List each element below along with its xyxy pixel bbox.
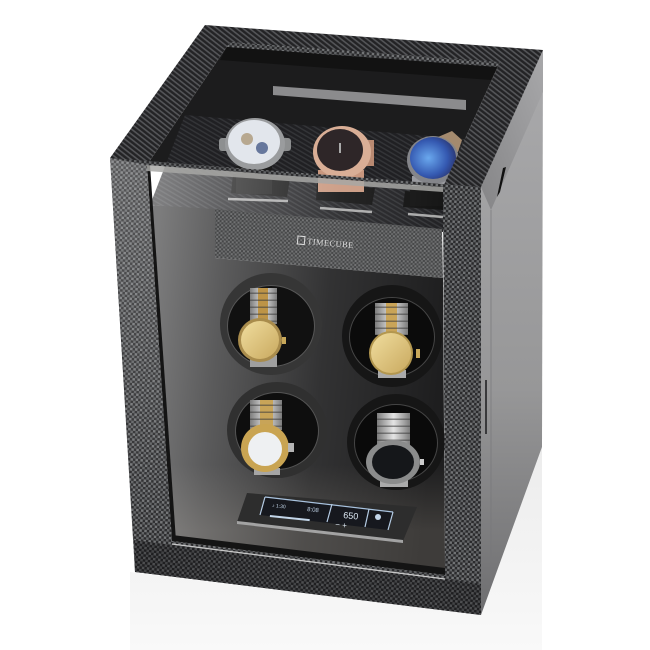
lid side panel: [481, 50, 543, 210]
front carbon frame: [110, 158, 481, 615]
lid window interior: [147, 41, 500, 187]
inner black gasket bottom: [172, 535, 445, 575]
top watches: [219, 118, 462, 206]
rotors: [220, 273, 445, 490]
display time text: 8:08: [307, 507, 320, 514]
display screen: [260, 497, 393, 530]
brand name: TIMECUBE: [307, 236, 354, 250]
rotor 4 with black dial watch: [347, 394, 445, 490]
display modes: [270, 515, 310, 521]
display dividers: [260, 497, 393, 530]
top carbon lid frame: [110, 25, 543, 187]
side seam: [490, 210, 492, 585]
watch tray: [150, 115, 475, 232]
touch control panel: [237, 493, 417, 543]
display icon: [375, 514, 381, 520]
left strip sheen: [110, 158, 172, 541]
display controls: − +: [335, 520, 348, 530]
side button: [485, 380, 487, 434]
top watch right: [407, 131, 462, 206]
top watch centre: [313, 126, 374, 192]
display outline: [265, 497, 393, 512]
cup highlights: [228, 199, 443, 217]
rotor 2 with gold date watch: [342, 285, 442, 387]
display date text: ♪ 1:30: [272, 503, 286, 510]
glass front top edge: [147, 165, 443, 192]
floor reflection: [130, 447, 542, 650]
rotor 1 with gold jubilee watch: [220, 273, 322, 375]
cabinet floor band: [170, 474, 445, 575]
bottom rim highlight: [172, 544, 445, 579]
inner black gasket left: [147, 165, 176, 541]
lid rear shadow: [220, 47, 497, 80]
bottom carbon strip: [134, 540, 481, 615]
tray cups: [231, 177, 290, 197]
back panel: [147, 174, 445, 575]
glass haze: [147, 165, 445, 575]
rotor 3 with two-tone white dial watch: [227, 382, 327, 478]
right side panel: [481, 50, 543, 615]
top watch left: [219, 118, 291, 194]
display count text: 650: [343, 510, 359, 522]
brand plate: [215, 209, 443, 278]
lid light bar: [273, 86, 466, 110]
watch winder cabinet: [110, 25, 543, 615]
interior behind glass: [147, 115, 475, 575]
lid rear rim: [227, 41, 500, 67]
side latch slot: [497, 167, 506, 197]
brand logo: [297, 236, 305, 245]
